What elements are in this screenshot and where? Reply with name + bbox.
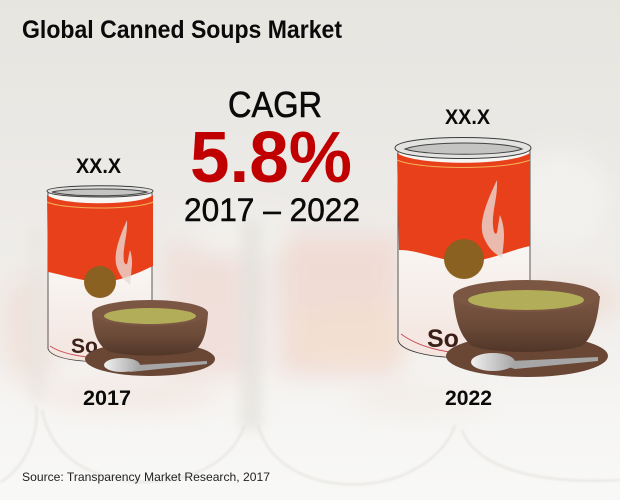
can label circle: [444, 239, 484, 279]
2022 group: can and bowl: [395, 106, 608, 410]
can label circle: [84, 266, 116, 298]
2017 value: XX.X: [76, 155, 121, 178]
CAGR period: 2017 – 2022: [184, 192, 360, 228]
title: Global Canned Soups Market: [22, 16, 343, 44]
icon: large soup can: [395, 138, 531, 358]
can label text: So: [427, 325, 459, 353]
2017 year label: 2017: [83, 387, 131, 410]
icon: small steam: [116, 220, 132, 285]
icon: small soup bowl: [85, 300, 215, 376]
icon: large soup bowl: [446, 280, 608, 377]
source note: Source: Transparency Market Research, 2017: [22, 470, 270, 484]
CAGR label: CAGR: [228, 84, 322, 125]
icon: small soup can: [47, 186, 153, 362]
2022 year label: 2022: [445, 387, 492, 410]
CAGR value: 5.8%: [190, 118, 352, 198]
2017 group: can and bowl: [47, 155, 215, 410]
icon: large steam: [482, 180, 504, 258]
2022 value: XX.X: [445, 106, 490, 129]
can label text: So: [71, 335, 98, 358]
